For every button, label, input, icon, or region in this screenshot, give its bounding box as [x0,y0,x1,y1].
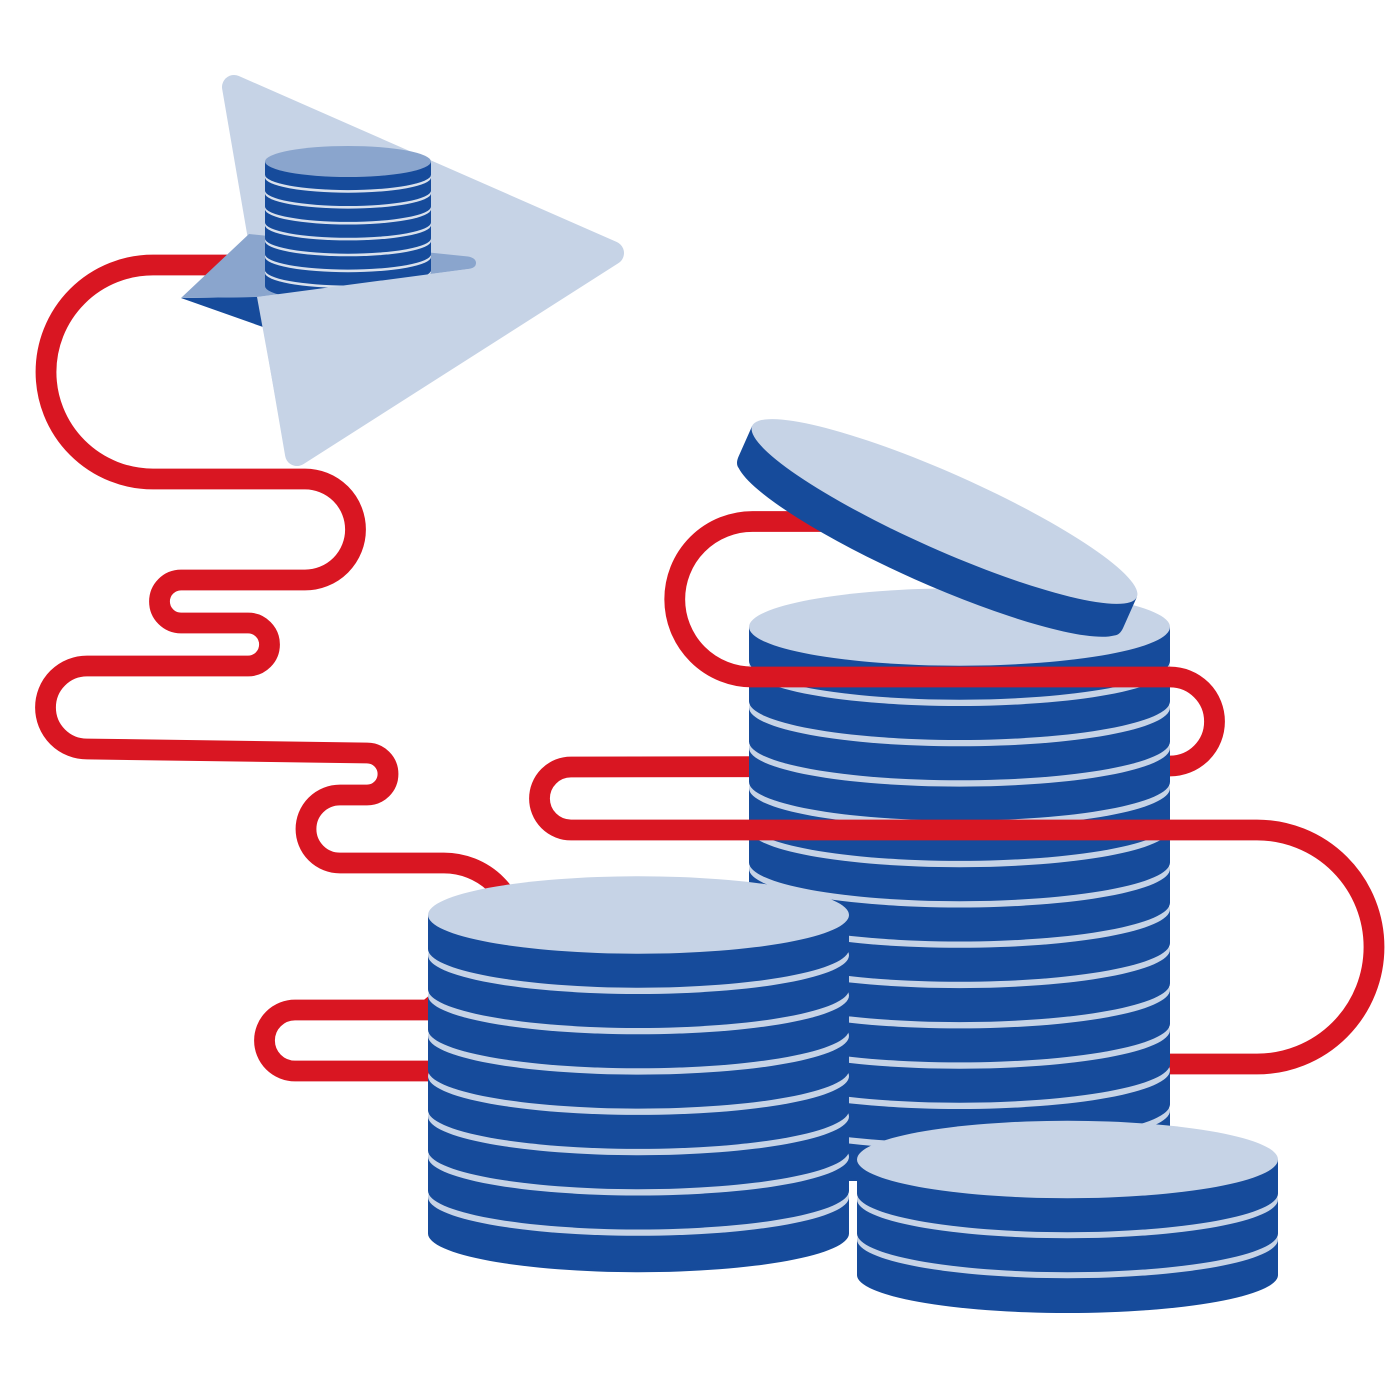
tilted falling coin [722,391,1152,665]
paper plane carrying small coin stack [181,87,612,454]
red winding trail [45,265,1374,1071]
tall coin stack [749,588,1170,1183]
plane fold [181,234,476,298]
plane front wing [257,255,600,450]
small coin stack [265,146,431,301]
plane body [234,87,612,454]
left coin stack [428,876,849,1272]
short coin stack [857,1121,1278,1313]
red trail bands crossing the tall stack [749,677,1170,830]
plane dark underside [181,297,263,327]
